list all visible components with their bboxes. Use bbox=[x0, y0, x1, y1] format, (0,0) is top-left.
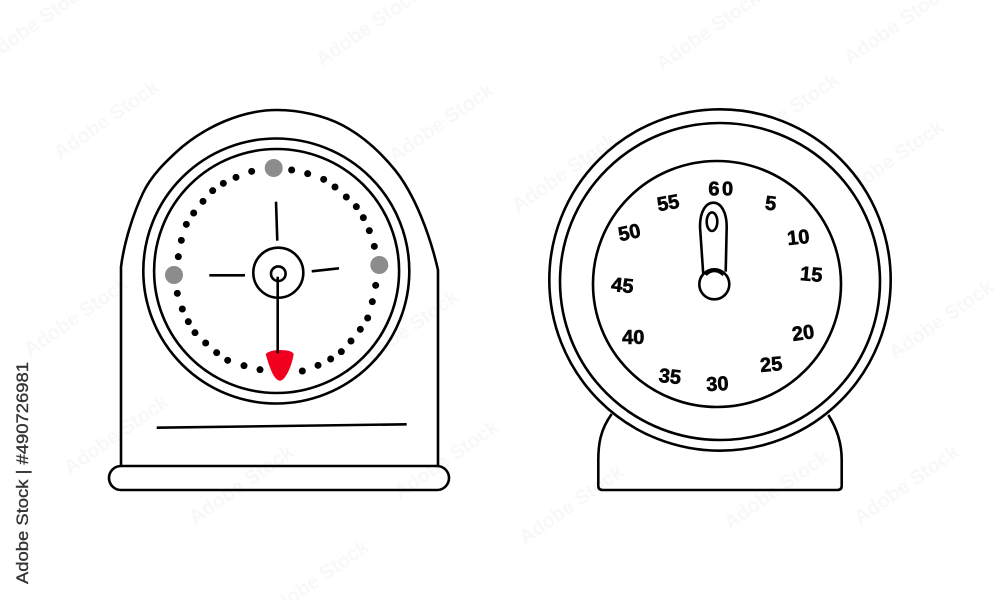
left clock bbox=[109, 110, 449, 490]
minute numbers bbox=[610, 178, 823, 396]
grey markers bbox=[165, 159, 388, 284]
minute numbers: 60 bbox=[708, 178, 736, 200]
red pointer bbox=[266, 350, 294, 381]
text: Adobe Stock bbox=[685, 276, 799, 364]
middle ring bbox=[560, 123, 880, 440]
text: Adobe Stock bbox=[720, 446, 834, 534]
text: Adobe Stock bbox=[390, 416, 504, 504]
text: Adobe Stock bbox=[730, 69, 844, 157]
minute numbers: 20 bbox=[791, 321, 816, 346]
text: Adobe Stock bbox=[50, 76, 164, 164]
text: Adobe Stock bbox=[385, 79, 499, 167]
text: Adobe Stock bbox=[835, 116, 949, 204]
inner dial ring bbox=[154, 149, 399, 393]
text: Adobe Stock bbox=[885, 276, 999, 364]
clock hand bbox=[276, 277, 279, 353]
minute numbers: 10 bbox=[786, 226, 811, 250]
minute numbers: 50 bbox=[616, 220, 643, 246]
text: Adobe Stock bbox=[185, 441, 299, 529]
right clock bbox=[549, 109, 891, 490]
timer hand bbox=[699, 203, 729, 299]
outer ring bbox=[549, 109, 891, 451]
left clock base bbox=[109, 466, 449, 490]
right clock stand bbox=[598, 414, 842, 490]
text: Adobe Stock bbox=[850, 441, 964, 529]
dial dots bbox=[174, 166, 379, 374]
minute numbers: 30 bbox=[706, 373, 729, 396]
cross ticks bbox=[209, 202, 339, 275]
text: Adobe Stock bbox=[60, 391, 174, 479]
text: Adobe Stock bbox=[350, 286, 464, 374]
center hub bbox=[253, 248, 303, 298]
text: Adobe Stock bbox=[515, 461, 629, 549]
minute numbers: 55 bbox=[655, 191, 681, 216]
minute numbers: 45 bbox=[610, 274, 635, 298]
left clock housing bbox=[121, 110, 438, 466]
minute numbers: 25 bbox=[759, 353, 783, 377]
minute numbers: 35 bbox=[658, 365, 682, 389]
minute numbers: 15 bbox=[799, 263, 823, 287]
text: Adobe Stock bbox=[508, 129, 622, 217]
minute numbers: 5 bbox=[764, 193, 777, 216]
minute numbers: 40 bbox=[622, 327, 644, 349]
dial face bbox=[593, 161, 841, 407]
label line bbox=[157, 424, 407, 428]
outer dial ring bbox=[143, 138, 409, 404]
text: Adobe Stock bbox=[20, 273, 134, 361]
stock image credit: Adobe Stock | #490726981 bbox=[13, 362, 32, 584]
